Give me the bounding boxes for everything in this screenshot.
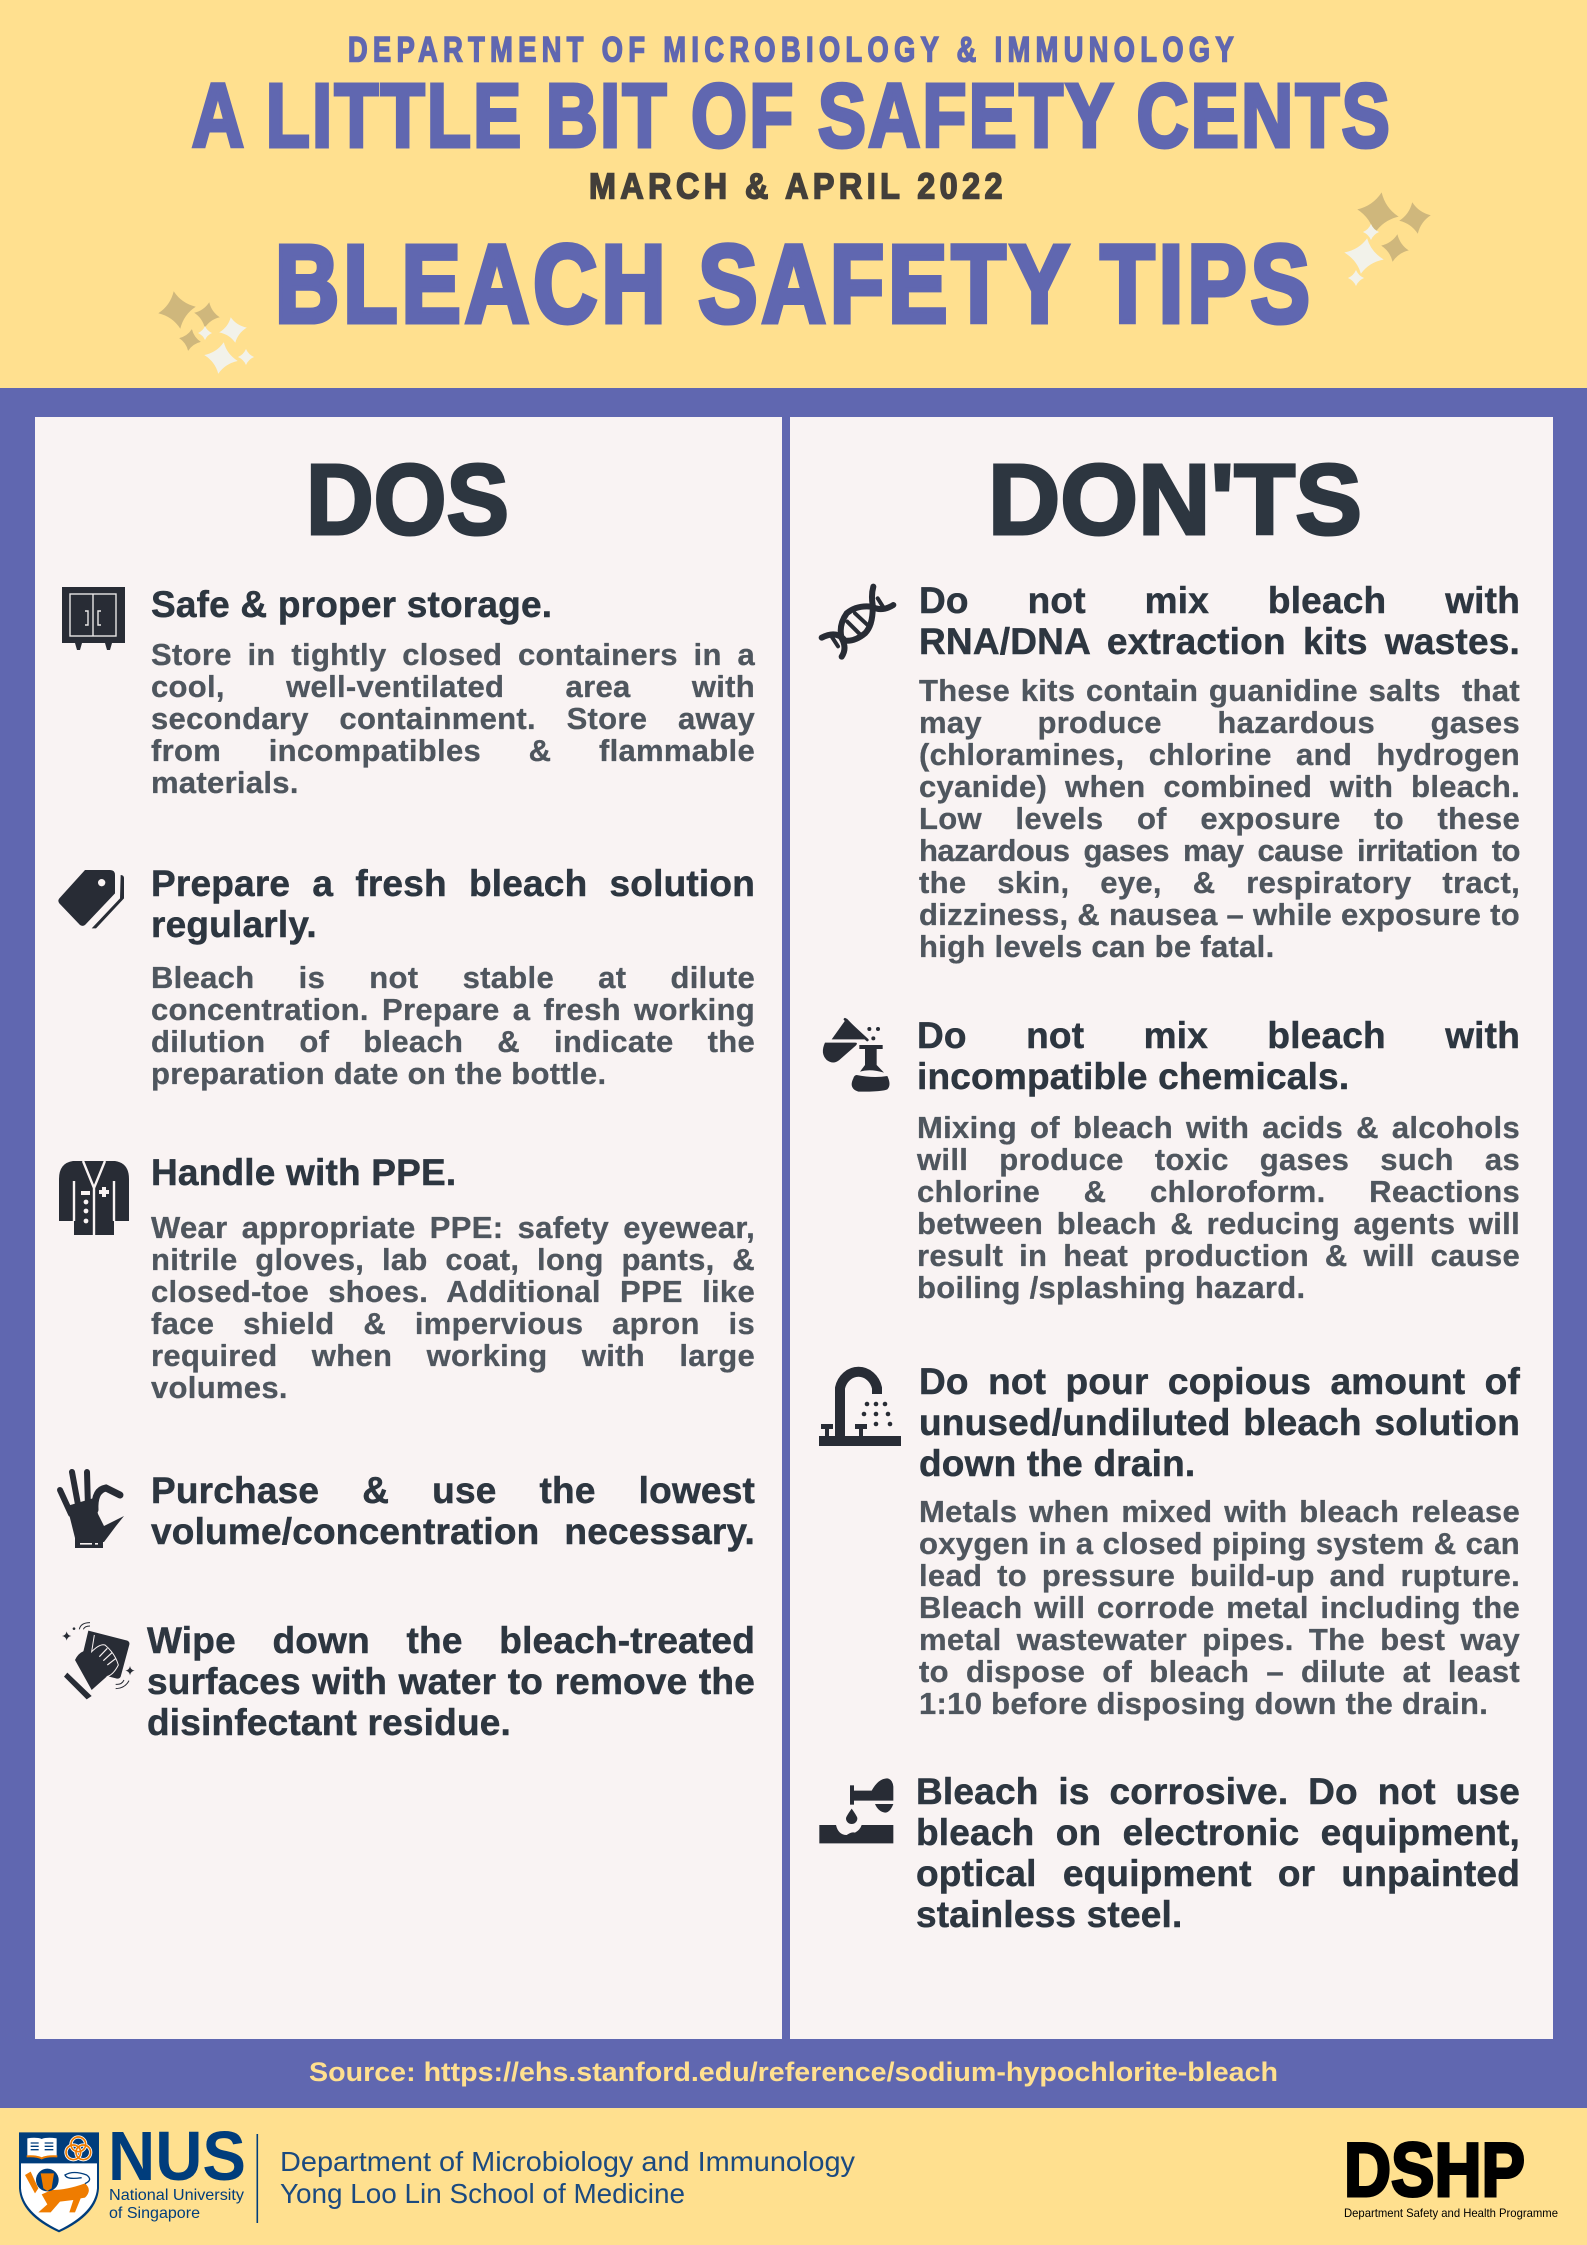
department name bbox=[280, 2146, 855, 2209]
text block: closed-toe shoes. Additional PPE like bbox=[151, 1274, 755, 1309]
text block: Metals when mixed with bleach release bbox=[919, 1494, 1520, 1529]
heading: DON'TS: DON'TS bbox=[988, 444, 1362, 556]
text block: volumes. bbox=[151, 1370, 288, 1405]
text block: hazardous gases may cause irritation to bbox=[919, 833, 1520, 868]
heading: Safe & proper storage. bbox=[151, 584, 552, 625]
heading: Do not pour copious amount of bbox=[919, 1361, 1520, 1402]
text block: Bleach will corrode metal including the bbox=[919, 1590, 1520, 1625]
icon: wiping hand bbox=[62, 1622, 134, 1700]
heading bbox=[917, 1015, 1520, 1097]
logo: NUS wordmark: of Singapore bbox=[109, 2205, 200, 2222]
text block bbox=[916, 1110, 1520, 1305]
heading: optical equipment or unpainted bbox=[916, 1852, 1520, 1894]
text block: Low levels of exposure to these bbox=[919, 801, 1520, 836]
text block: to dispose of bleach – dilute at least bbox=[919, 1654, 1520, 1689]
text block: required when working with large bbox=[151, 1338, 755, 1373]
date: MARCH & APRIL 2022 bbox=[589, 166, 1007, 206]
text block: Store in tightly closed containers in a bbox=[151, 637, 755, 672]
text block: face shield & impervious apron is bbox=[151, 1306, 755, 1341]
heading: bleach on electronic equipment, bbox=[916, 1812, 1520, 1852]
text block: preparation date on the bottle. bbox=[151, 1056, 606, 1091]
heading bbox=[919, 580, 1520, 662]
icon: DNA bbox=[818, 584, 896, 660]
item: lowest volume bbox=[57, 1469, 755, 1552]
text block bbox=[150, 1210, 755, 1405]
text block: nitrile gloves, lab coat, long pants, & bbox=[151, 1242, 755, 1277]
text block: 1:10 before disposing down the drain. bbox=[919, 1686, 1488, 1721]
item: wipe down bbox=[62, 1620, 755, 1743]
text block: oxygen in a closed piping system & can bbox=[919, 1526, 1520, 1561]
text block: the skin, eye, & respiratory tract, bbox=[919, 865, 1520, 900]
heading: Prepare a fresh bleach solution bbox=[151, 862, 755, 904]
text block: will produce toxic gases such as bbox=[917, 1142, 1520, 1177]
item: incompatible chemicals bbox=[822, 1015, 1520, 1305]
text block bbox=[919, 673, 1520, 964]
text block: Bleach is not stable at dilute bbox=[151, 960, 755, 995]
heading: Do not mix bleach with bbox=[917, 1015, 1520, 1056]
text block: secondary containment. Store away bbox=[151, 701, 755, 736]
text block: metal wastewater pipes. The best way bbox=[919, 1622, 1520, 1657]
text block bbox=[151, 960, 755, 1091]
icon: faucet bbox=[819, 1366, 901, 1446]
logo: NUS wordmark: NUS bbox=[108, 2117, 246, 2195]
text block bbox=[151, 637, 756, 800]
panel: don'ts bbox=[790, 417, 1553, 2039]
text block: dilution of bleach & indicate the bbox=[151, 1024, 755, 1059]
icon: cabinet bbox=[62, 587, 125, 650]
text block: from incompatibles & flammable bbox=[151, 733, 755, 768]
text block: These kits contain guanidine salts that bbox=[919, 673, 1520, 708]
text block: materials. bbox=[151, 765, 299, 800]
department line: DEPARTMENT OF MICROBIOLOGY & IMMUNOLOGY bbox=[348, 30, 1239, 70]
heading: Wipe down the bleach-treated bbox=[147, 1620, 755, 1661]
text block: high levels can be fatal. bbox=[919, 929, 1275, 964]
department name: Yong Loo Lin School of Medicine bbox=[280, 2178, 685, 2209]
heading: Do not mix bleach with bbox=[919, 580, 1520, 621]
heading: stainless steel. bbox=[916, 1894, 1182, 1934]
heading bbox=[151, 862, 755, 945]
main heading: BLEACH SAFETY TIPS bbox=[275, 223, 1314, 346]
text block: concentration. Prepare a fresh working bbox=[151, 992, 755, 1027]
text block: may produce hazardous gases bbox=[919, 705, 1520, 740]
heading: Bleach is corrosive. Do not use bbox=[916, 1770, 1520, 1812]
text block: cyanide) when combined with bleach. bbox=[919, 769, 1520, 804]
header banner bbox=[0, 0, 1587, 388]
source citation: Source: https://ehs.stanford.edu/reference/sodium-hypochlorite-bleach bbox=[309, 2057, 1278, 2087]
text block: boiling /splashing hazard. bbox=[917, 1270, 1305, 1305]
text block: cool, well-ventilated area with bbox=[151, 669, 755, 704]
heading: unused/undiluted bleach solution bbox=[919, 1402, 1520, 1443]
logo: DSHP: DSHP bbox=[1344, 2128, 1525, 2213]
icon: flasks bbox=[822, 1018, 890, 1092]
heading: disinfectant residue. bbox=[147, 1702, 511, 1743]
text block: result in heat production & will cause bbox=[917, 1238, 1520, 1273]
heading: RNA/DNA extraction kits wastes. bbox=[919, 621, 1520, 662]
text block bbox=[919, 1494, 1520, 1721]
heading: Handle with PPE. bbox=[151, 1152, 456, 1192]
text block: Wear appropriate PPE: safety eyewear, bbox=[151, 1210, 755, 1245]
item: safe storage bbox=[62, 584, 756, 800]
item: fresh solution bbox=[58, 862, 755, 1091]
text block: Mixing of bleach with acids & alcohols bbox=[917, 1110, 1520, 1145]
logo: DSHP: Department Safety and Health Programme bbox=[1344, 2206, 1558, 2220]
sparkles: upper right bbox=[1341, 189, 1434, 286]
heading: incompatible chemicals. bbox=[917, 1056, 1349, 1097]
heading bbox=[916, 1770, 1520, 1934]
item: PPE bbox=[59, 1152, 755, 1405]
item: corrosive bbox=[819, 1770, 1520, 1934]
icon: corrosive drip bbox=[819, 1778, 894, 1844]
logo: NUS wordmark: National University bbox=[109, 2187, 244, 2204]
logo: NUS shield bbox=[19, 2132, 99, 2232]
heading: DOS: DOS bbox=[306, 444, 509, 556]
item: extraction kits bbox=[818, 580, 1520, 964]
text block: chlorine & chloroform. Reactions bbox=[917, 1174, 1520, 1209]
text block: between bleach & reducing agents will bbox=[917, 1206, 1520, 1241]
heading: volume/concentration necessary. bbox=[151, 1510, 755, 1552]
icon: hand bbox=[57, 1469, 124, 1548]
heading: surfaces with water to remove the bbox=[147, 1661, 755, 1702]
heading: Purchase & use the lowest bbox=[151, 1470, 755, 1510]
sparkles: lower left bbox=[155, 288, 254, 377]
text block: dizziness, & nausea – while exposure to bbox=[919, 897, 1520, 932]
icon: lab coat bbox=[59, 1161, 129, 1235]
text block: (chloramines, chlorine and hydrogen bbox=[919, 737, 1520, 772]
heading bbox=[919, 1361, 1520, 1484]
heading bbox=[150, 1470, 755, 1552]
panel: dos bbox=[35, 417, 782, 2039]
icon: tag bbox=[58, 870, 124, 928]
heading: regularly. bbox=[151, 904, 317, 944]
text block: lead to pressure build-up and rupture. bbox=[919, 1558, 1520, 1593]
heading bbox=[146, 1620, 755, 1743]
heading: down the drain. bbox=[919, 1443, 1195, 1484]
footer band bbox=[0, 2108, 1587, 2245]
item: drain bbox=[819, 1361, 1520, 1721]
department name: Department of Microbiology and Immunology bbox=[280, 2146, 855, 2177]
